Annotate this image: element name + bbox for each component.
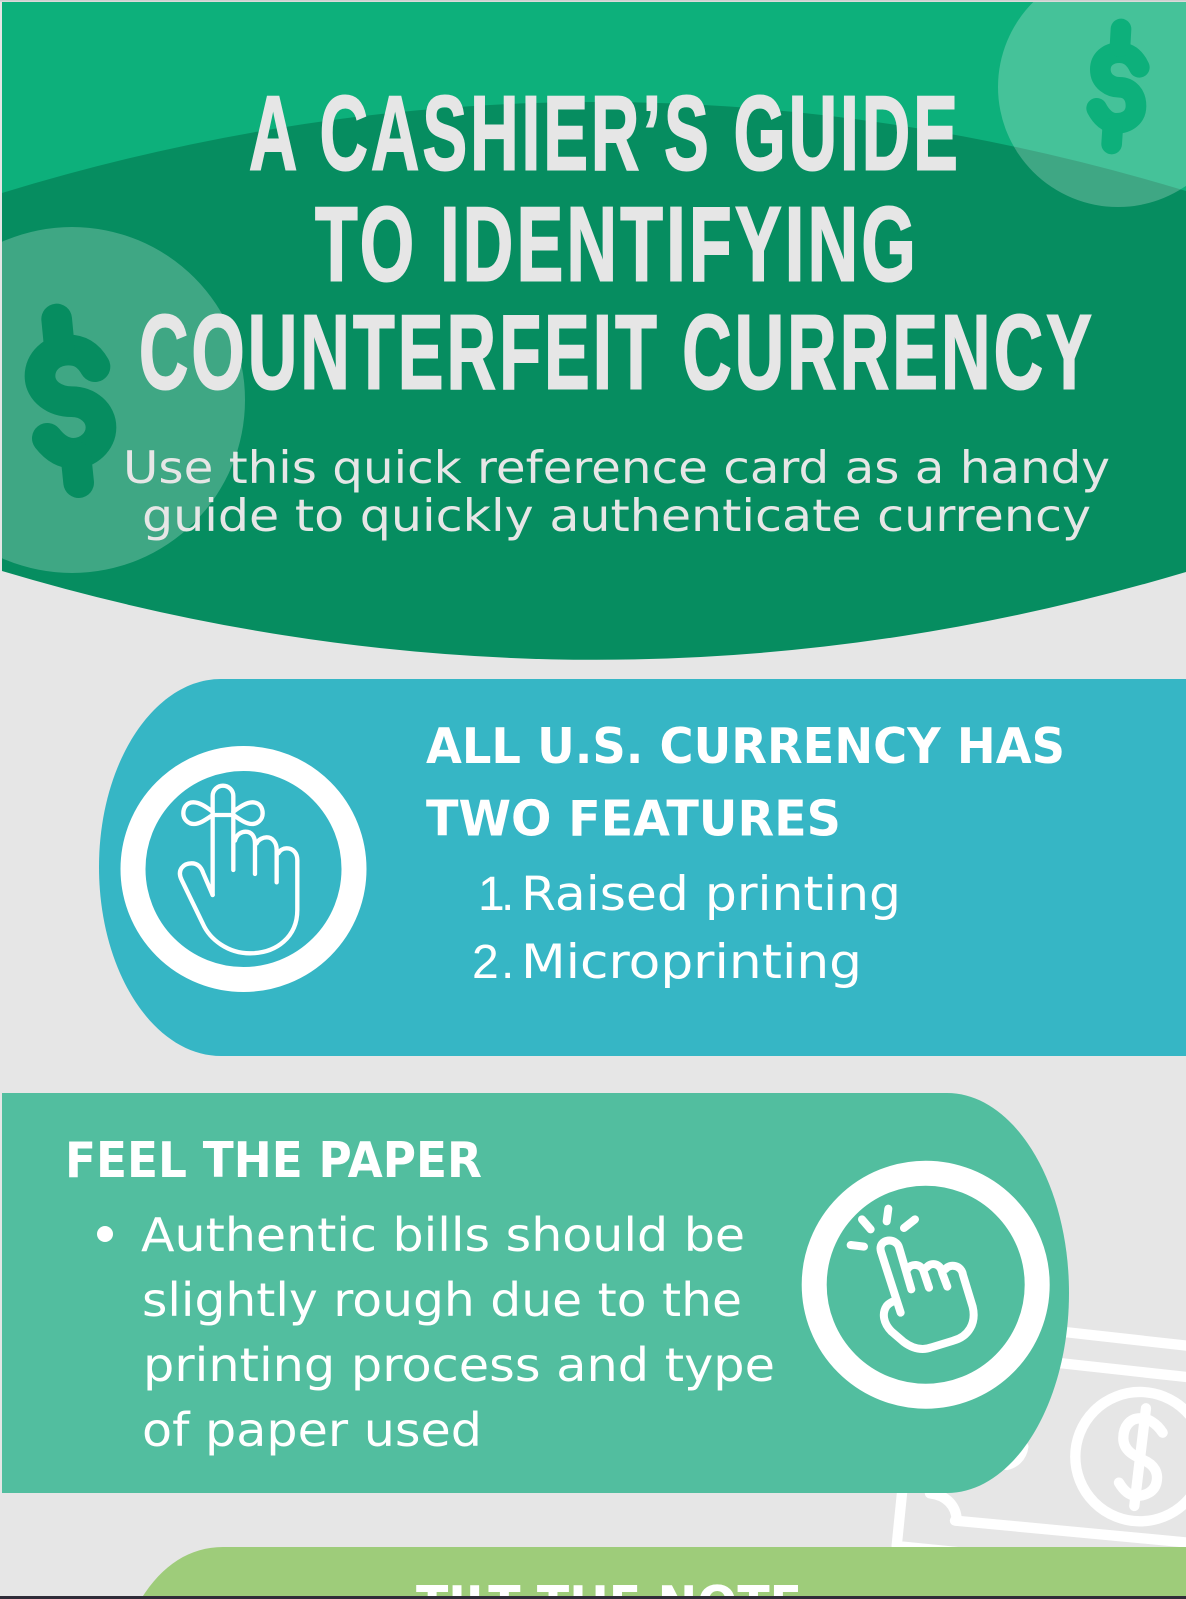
icon: dollar bills behind panel [897, 1330, 1186, 1555]
subtitle [123, 443, 1110, 542]
title [139, 74, 1095, 412]
header background: dark green arc [2, 102, 1186, 660]
bullet text: slightly rough due to the [142, 1273, 742, 1327]
blue panel background [99, 679, 1186, 1056]
subtitle: Use this quick reference card as a handy [123, 443, 1110, 494]
icon: tapping finger [814, 1173, 1037, 1396]
header panel [0, 0, 1186, 660]
panel heading: TWO FEATURES [426, 790, 841, 848]
subtitle: guide to quickly authenticate currency [142, 491, 1091, 542]
numbered list: Raised printing [521, 867, 901, 922]
lime panel background [141, 1547, 1186, 1599]
decorative coin: top right [998, 0, 1186, 207]
numbered list: 1. [478, 868, 514, 921]
bullet text: Authentic bills should be [141, 1208, 745, 1262]
bullet [97, 1226, 113, 1242]
panel: tilt the note [141, 1547, 1186, 1599]
icon: finger with reminder string [133, 758, 354, 980]
header background: bright green top [2, 2, 1186, 202]
panel: feel the paper [2, 1093, 1069, 1493]
numbered list: Microprinting [521, 935, 862, 990]
panel heading: FEEL THE PAPER [65, 1132, 482, 1189]
bullet text: printing process and type [143, 1338, 775, 1392]
panel heading: ALL U.S. CURRENCY HAS [426, 718, 1065, 775]
numbered list [472, 867, 901, 990]
bullet text: of paper used [142, 1403, 482, 1457]
teal green panel background [2, 1093, 1069, 1493]
bullet text [141, 1208, 775, 1457]
panel heading [426, 718, 1065, 848]
decorative coin: left [0, 227, 245, 573]
numbered list: 2. [472, 936, 514, 989]
panel: all U.S. currency has two features [99, 679, 1186, 1056]
